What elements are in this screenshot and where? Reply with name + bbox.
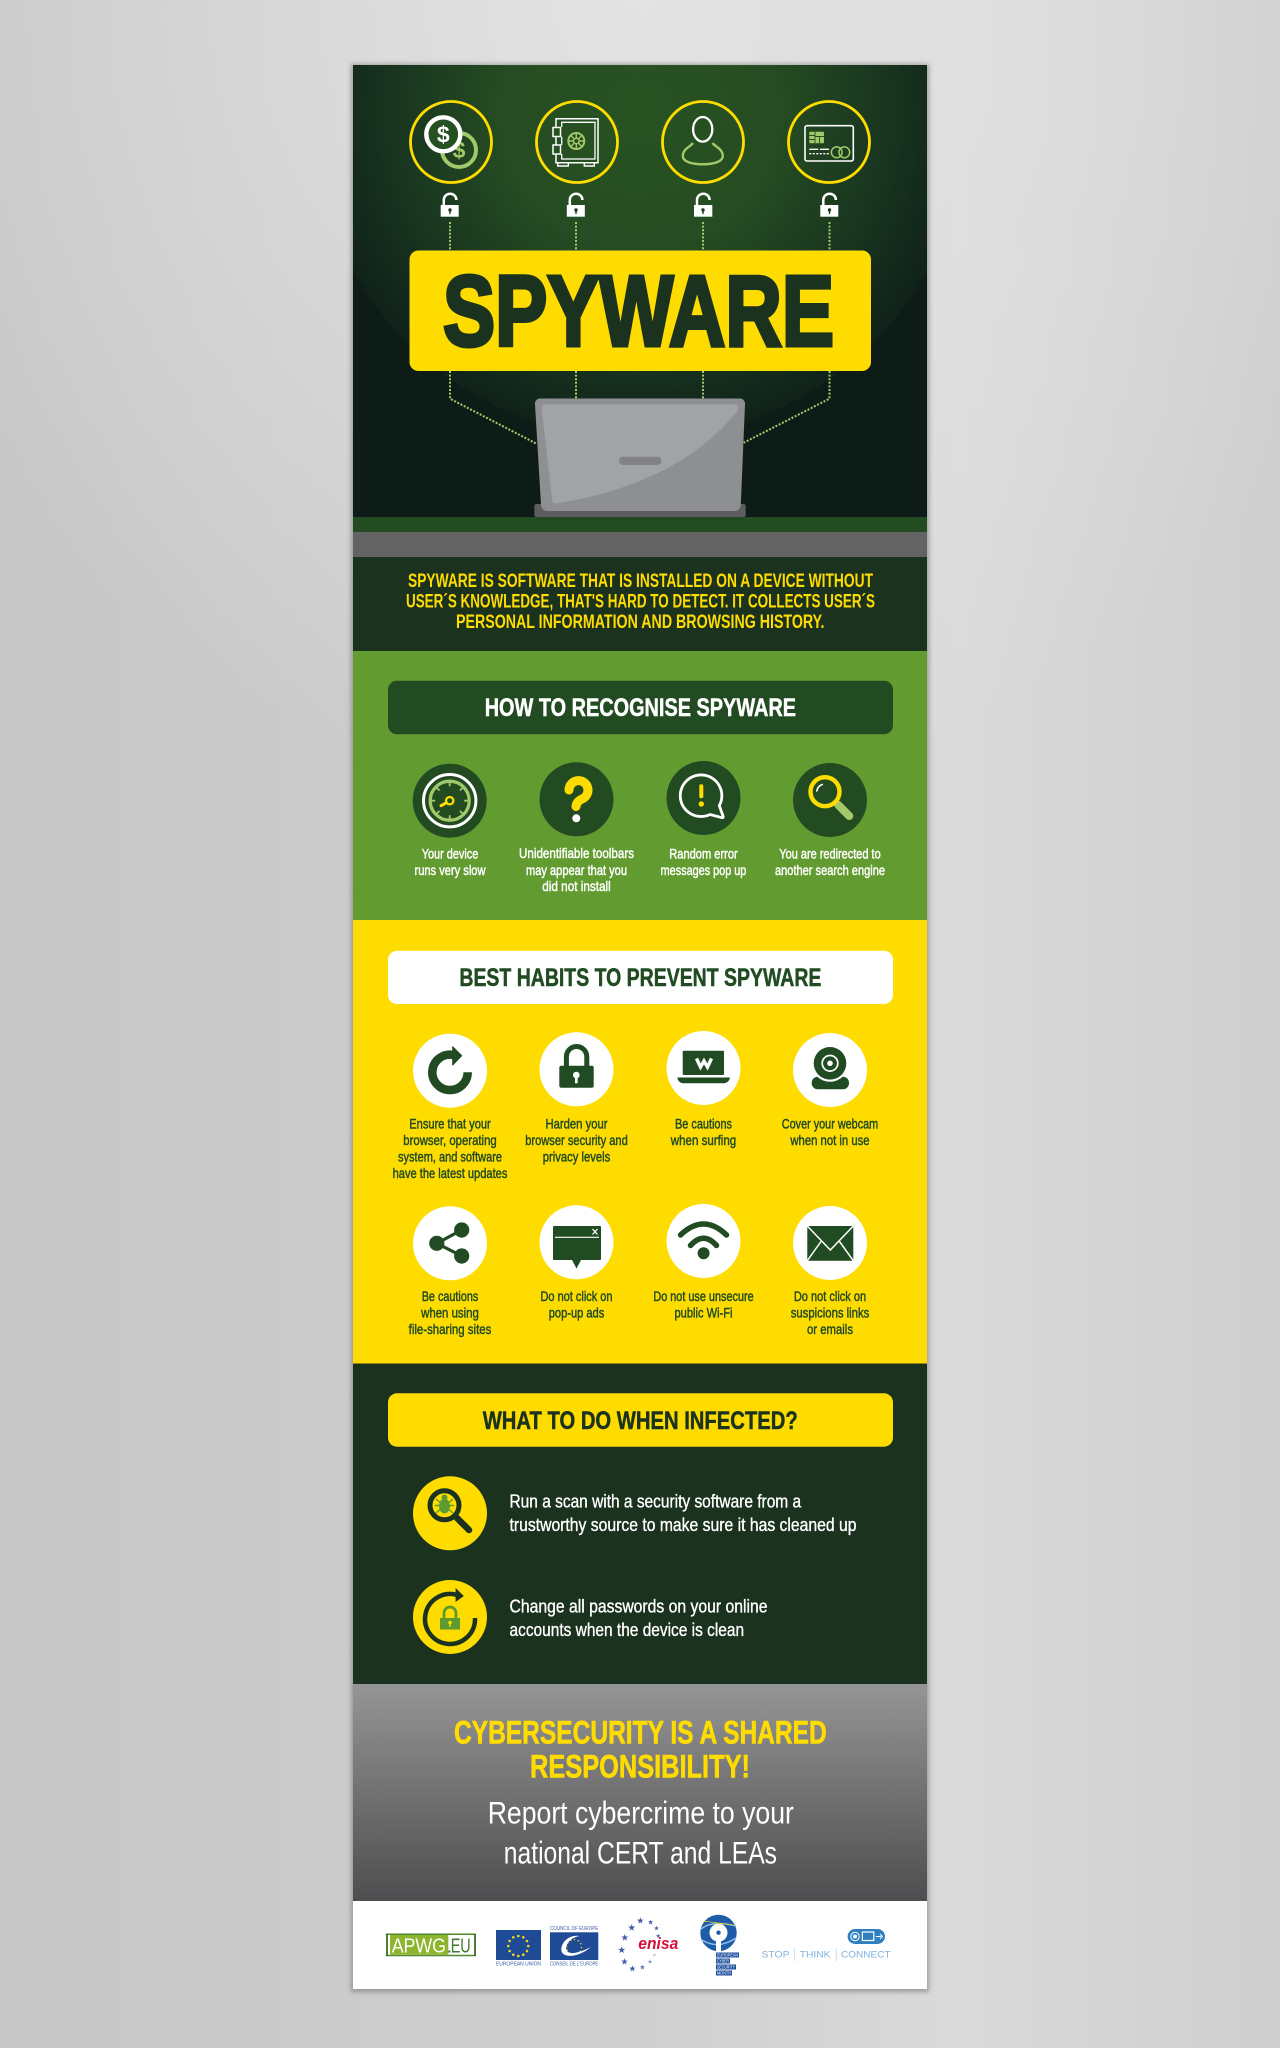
panel: infographic sheet shadow xyxy=(351,64,929,1992)
logo: European Cyber Security Month xyxy=(700,1915,739,1976)
icon: open padlock 3 xyxy=(694,194,712,217)
heading: best habits: BEST HABITS TO PREVENT SPYWARE xyxy=(459,964,821,992)
caption: updates xyxy=(393,1115,507,1181)
caption: updates: Ensure that your xyxy=(409,1115,491,1131)
caption: pop-up ads: Do not click on xyxy=(540,1288,612,1304)
icon: person xyxy=(662,102,744,182)
dotted connectors xyxy=(450,222,830,444)
logo: Stop Think Connect xyxy=(762,1929,891,1961)
caption: webcam: Cover your webcam xyxy=(782,1115,878,1131)
icon: speech bubble alert xyxy=(666,761,740,835)
panel: partner logos xyxy=(353,1901,927,1989)
caption: harden browser: browser security and xyxy=(525,1132,628,1148)
logo: Council of Europe: COUNCIL OF EUROPE xyxy=(550,1926,599,1932)
logo: APWG.EU xyxy=(386,1934,476,1957)
text: run a scan xyxy=(510,1492,856,1535)
caption: device slow: Your device xyxy=(422,845,478,861)
caption: toolbars xyxy=(519,845,634,894)
text: run a scan: trustworthy source to make sure it has cleaned up xyxy=(510,1515,856,1535)
text: change passwords: accounts when the device is clean xyxy=(510,1620,744,1640)
panel: definition intro xyxy=(353,557,927,651)
heading: how to recognise spyware: HOW TO RECOGNISE SPYWARE xyxy=(485,694,796,722)
caption: public wi-fi xyxy=(653,1288,754,1321)
icon: refresh xyxy=(413,1034,487,1108)
caption: device slow xyxy=(414,845,486,878)
caption: error messages: messages pop up xyxy=(661,862,747,878)
icon: padlock xyxy=(540,1032,614,1106)
heading: what to do when infected xyxy=(388,1393,893,1447)
icon: open padlock 4 xyxy=(820,194,838,217)
logo: Stop Think Connect: STOP xyxy=(762,1950,790,1960)
logo: European Union xyxy=(496,1930,541,1968)
icon: open padlock 2 xyxy=(567,194,585,217)
caption: surfing xyxy=(670,1115,736,1148)
caption: redirected: You are redirected to xyxy=(779,845,881,861)
caption: file sharing: Be cautions xyxy=(422,1288,478,1304)
logo: European Union: EUROPEAN UNION xyxy=(496,1962,541,1968)
heading: cybersecurity is a shared responsibility: RESPONSIBILITY! xyxy=(530,1748,750,1784)
caption: toolbars: Unidentifiable toolbars xyxy=(519,845,634,861)
heading: what to do when infected: WHAT TO DO WHEN INFECTED? xyxy=(483,1407,798,1435)
caption: harden browser: privacy levels xyxy=(543,1148,610,1164)
caption: device slow: runs very slow xyxy=(414,862,486,878)
panel: header hero xyxy=(353,65,927,557)
icon: magnifier xyxy=(793,763,867,837)
text: definition: USER´S KNOWLEDGE, THAT'S HARD TO DETECT. IT COLLECTS USER´S xyxy=(406,592,875,612)
caption: error messages: Random error xyxy=(669,845,738,861)
icon: gauge xyxy=(413,764,487,838)
icon: envelope xyxy=(793,1206,867,1280)
caption: webcam xyxy=(782,1115,878,1148)
text: definition: SPYWARE IS SOFTWARE THAT IS INSTALLED ON A DEVICE WITHOUT xyxy=(408,571,873,592)
caption: suspicious links: suspicions links xyxy=(791,1305,869,1321)
caption: public wi-fi: public Wi-Fi xyxy=(674,1305,732,1321)
logo: European Cyber Security Month: MONTH xyxy=(717,1970,731,1976)
icon: laptop www xyxy=(666,1031,740,1105)
icon: laptop xyxy=(534,398,746,517)
text: change passwords: Change all passwords on your online xyxy=(510,1597,768,1617)
caption: toolbars: did not install xyxy=(542,878,611,894)
panel: best habits xyxy=(353,920,927,1364)
logo: Stop Think Connect: CONNECT xyxy=(841,1950,891,1960)
caption: updates: have the latest updates xyxy=(393,1165,507,1181)
caption: error messages xyxy=(661,845,747,878)
caption: harden browser xyxy=(525,1115,628,1164)
caption: suspicious links: or emails xyxy=(807,1321,853,1337)
caption: suspicious links: Do not click on xyxy=(794,1288,866,1304)
icon: scan magnifier with bug xyxy=(413,1476,487,1550)
heading: cybersecurity is a shared responsibility: CYBERSECURITY IS A SHARED xyxy=(454,1714,827,1750)
caption: updates: system, and software xyxy=(398,1148,502,1164)
caption: surfing: Be cautions xyxy=(675,1115,732,1131)
icon: open padlock 1 xyxy=(441,194,459,217)
logo: APWG.EU: EU xyxy=(451,1935,471,1957)
heading: cybersecurity is a shared responsibility xyxy=(454,1714,827,1784)
logo: APWG.EU: APWG xyxy=(392,1935,446,1957)
caption: redirected xyxy=(775,845,885,878)
icon: safe xyxy=(536,102,618,182)
logo: enisa xyxy=(618,1917,678,1971)
icon: coins: $ xyxy=(437,121,450,147)
text: run a scan: Run a scan with a security software from a xyxy=(510,1492,802,1512)
icon: coins: $ xyxy=(453,137,466,163)
logo: Stop Think Connect: THINK xyxy=(800,1950,830,1960)
text: report cybercrime xyxy=(488,1794,794,1870)
logo: Council of Europe xyxy=(550,1926,599,1968)
title banner: SPYWARE xyxy=(443,256,834,368)
logo: enisa: enisa xyxy=(638,1934,678,1953)
icon: refresh with lock xyxy=(413,1580,487,1654)
icon: wi-fi xyxy=(666,1204,740,1278)
logo: European Cyber Security Month: EUROPEAN xyxy=(717,1952,738,1958)
icon: webcam xyxy=(793,1033,867,1107)
logo: European Cyber Security Month: CYBER xyxy=(717,1958,730,1964)
caption: file sharing: file-sharing sites xyxy=(409,1321,491,1337)
text: definition xyxy=(406,571,875,633)
caption: file sharing xyxy=(409,1288,491,1337)
text: report cybercrime: Report cybercrime to your xyxy=(488,1794,794,1830)
text: report cybercrime: national CERT and LEAs xyxy=(504,1834,777,1870)
panel: what to do when infected xyxy=(353,1364,927,1684)
caption: file sharing: when using xyxy=(420,1305,479,1321)
icon: share xyxy=(413,1206,487,1280)
caption: redirected: another search engine xyxy=(775,862,885,878)
caption: suspicious links xyxy=(791,1288,869,1337)
caption: pop-up ads xyxy=(540,1288,612,1321)
caption: pop-up ads: pop-up ads xyxy=(549,1305,604,1321)
logo: European Cyber Security Month: SECURITY xyxy=(717,1964,735,1970)
caption: webcam: when not in use xyxy=(790,1132,870,1148)
caption: toolbars: may appear that you xyxy=(526,862,627,878)
panel: shared responsibility xyxy=(353,1684,927,1901)
caption: updates: browser, operating xyxy=(403,1132,497,1148)
caption: harden browser: Harden your xyxy=(546,1115,608,1131)
logo: Council of Europe: CONSEIL DE L'EUROPE xyxy=(550,1962,599,1968)
caption: surfing: when surfing xyxy=(670,1132,736,1148)
heading: how to recognise spyware xyxy=(388,681,893,734)
icon: pop-up ad xyxy=(540,1205,614,1279)
icon: credit card xyxy=(788,102,870,182)
icon: question mark xyxy=(540,762,614,836)
heading: best habits xyxy=(388,951,893,1004)
text: definition: PERSONAL INFORMATION AND BROWSING HISTORY. xyxy=(456,612,824,633)
icon: coins xyxy=(410,102,492,182)
caption: public wi-fi: Do not use unsecure xyxy=(653,1288,754,1304)
text: change passwords xyxy=(510,1597,768,1640)
panel: how to recognise xyxy=(353,651,927,920)
